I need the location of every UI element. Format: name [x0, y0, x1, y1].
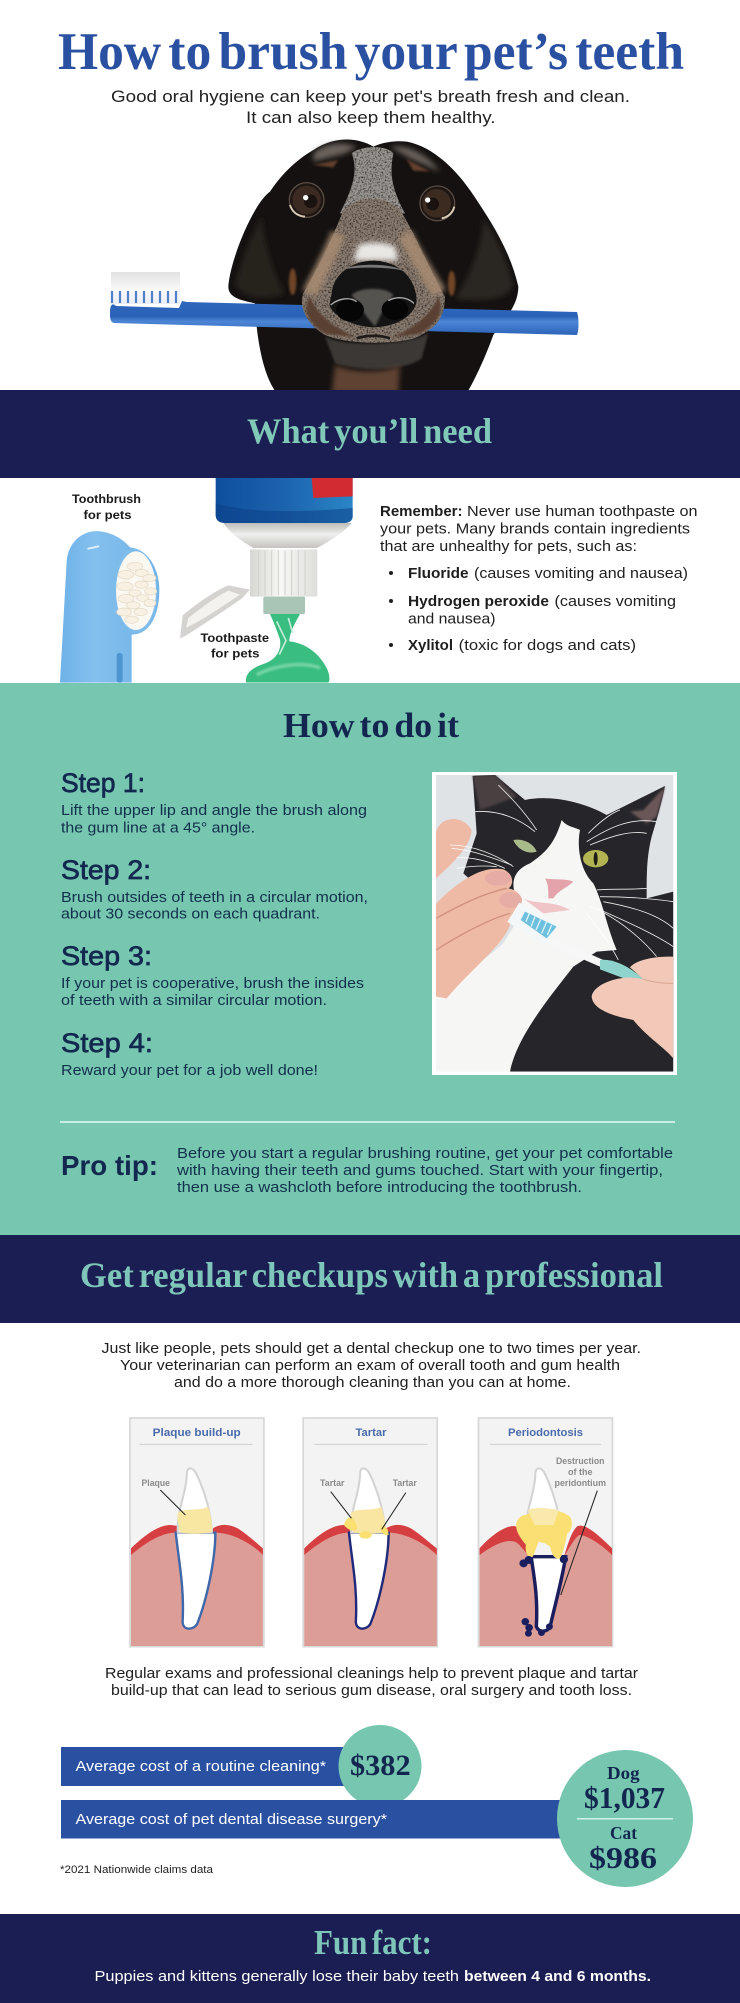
label: toothpaste for pets: for pets — [211, 646, 260, 660]
label: plaque: Plaque — [142, 1478, 170, 1488]
dog muzzle — [302, 199, 445, 343]
labels: tartar callouts: Tartar — [320, 1478, 345, 1488]
badge: dog and cat cost: $986 — [589, 1840, 657, 1875]
text: fun fact — [94, 1968, 651, 1985]
badge: $382 — [338, 1725, 422, 1807]
subtitle: It can also keep them healthy. — [246, 108, 496, 127]
list: unhealthy ingredients: Xylitol — [408, 637, 453, 654]
badge: $382: $382 — [350, 1749, 411, 1782]
badge: dog and cat cost — [557, 1750, 693, 1887]
photo: dog holding toothbrush — [110, 140, 578, 393]
title: How to brush your pet’s teeth — [58, 23, 684, 81]
panel: supplies — [60, 478, 698, 683]
band: what you'll need — [0, 390, 740, 478]
label: toothpaste for pets: Toothpaste — [200, 631, 269, 645]
label: plaque build-up: Plaque build-up — [153, 1427, 241, 1439]
subtitle — [111, 87, 630, 127]
labels: tartar callouts: Tartar — [393, 1478, 417, 1488]
step 3 — [61, 941, 364, 1009]
right eye — [420, 186, 455, 221]
text: regular exams — [105, 1665, 638, 1699]
text: checkup intro — [102, 1340, 641, 1391]
step 2: Brush outsides of teeth in a circular motion, — [61, 889, 368, 906]
bar: routine cleaning — [61, 1747, 351, 1786]
step 3: Step 3: — [61, 941, 152, 971]
divider — [60, 1121, 675, 1123]
pro tip text: then use a washcloth before introducing the toothbrush. — [177, 1179, 582, 1196]
step 1: Lift the upper lip and angle the brush along — [61, 802, 367, 819]
left eye — [289, 183, 324, 217]
step 3: If your pet is cooperative, brush the insides — [61, 975, 364, 992]
diagram: plaque build-up — [130, 1418, 264, 1647]
dog head — [228, 140, 518, 393]
label: destruction of the peridontium — [554, 1456, 606, 1488]
label: toothbrush for pets — [72, 492, 141, 522]
toothbrush — [110, 272, 578, 335]
cat dark fur — [463, 775, 673, 1072]
bar: dental disease surgery — [61, 1800, 566, 1838]
list: unhealthy ingredients: Fluoride — [408, 565, 469, 582]
lower chin — [325, 333, 428, 369]
label: toothpaste for pets — [200, 631, 269, 660]
step 4: Reward your pet for a job well done! — [61, 1062, 318, 1079]
text: regular exams: build-up that can lead to serious gum disease, oral surgery and tooth loss. — [111, 1682, 632, 1699]
text: remember — [380, 503, 698, 555]
heading: what you'll need: What you’ll need — [247, 411, 492, 451]
labels: tartar callouts — [320, 1478, 417, 1488]
heading: fun fact: Fun fact: — [314, 1923, 432, 1962]
text: checkup intro: Your veterinarian can perform an exam of overall tooth and gum health — [120, 1357, 620, 1374]
text: checkup intro: and do a more thorough cleaning than you can at home. — [174, 1374, 571, 1391]
left hand — [436, 819, 472, 878]
text: fun fact: between 4 and 6 months. — [464, 1968, 651, 1985]
nose — [329, 261, 417, 327]
toothbrush — [584, 954, 603, 967]
text: remember: Never use human toothpaste on — [467, 503, 698, 520]
list: unhealthy ingredients: (causes vomiting and nausea) — [474, 565, 688, 582]
heading: get regular checkups: Get regular checkups with a professional — [80, 1255, 663, 1295]
pro tip label: Pro tip: — [61, 1150, 158, 1181]
step 2: about 30 seconds on each quadrant. — [61, 906, 320, 922]
step 1: the gum line at a 45° angle. — [61, 820, 255, 836]
heading: how to do it: How to do it — [283, 706, 459, 745]
text: remember: your pets. Many brands contain ingredients — [380, 520, 690, 538]
photo: cat having teeth brushed — [432, 772, 677, 1075]
text: checkup intro: Just like people, pets should get a dental checkup one to two times per year. — [102, 1340, 641, 1357]
step 4 — [61, 1028, 318, 1079]
step 3: of teeth with a similar circular motion. — [61, 992, 327, 1009]
text: regular exams: Regular exams and professional cleanings help to prevent plaque and tartar — [105, 1665, 638, 1682]
label: toothbrush for pets: for pets — [84, 508, 132, 522]
forehead blaze — [340, 147, 405, 213]
tan patches — [289, 268, 296, 295]
pro tip text: Before you start a regular brushing routine, get your pet comfortable — [177, 1145, 673, 1162]
label: destruction of the peridontium: of the — [568, 1467, 592, 1477]
text: fun fact: Puppies and kittens generally lose their baby teeth — [94, 1968, 459, 1985]
footnote: *2021 Nationwide claims data — [60, 1864, 214, 1876]
right hand — [592, 957, 673, 1058]
label: destruction of the peridontium: peridontium — [554, 1478, 606, 1488]
badge: dog and cat cost: Dog — [607, 1763, 640, 1783]
cost chart — [60, 1725, 693, 1887]
text: remember: that are unhealthy for pets, such as: — [380, 538, 637, 555]
step 1 — [61, 768, 367, 836]
diagram: tartar — [303, 1418, 437, 1647]
whiskers — [450, 785, 673, 960]
bar: routine cleaning: Average cost of a routine cleaning* — [76, 1758, 326, 1775]
label: tartar heading: Tartar — [356, 1427, 387, 1439]
step 2 — [61, 855, 368, 922]
band: fun fact — [0, 1914, 740, 2003]
list: unhealthy ingredients: (causes vomiting — [554, 593, 676, 610]
list: unhealthy ingredients — [389, 565, 688, 654]
label: periodontosis heading: Periodontosis — [508, 1427, 583, 1439]
pro tip text: with having their teeth and gums touched. Start with your fingertip, — [176, 1162, 663, 1179]
panel: how to do it — [0, 683, 740, 1235]
step 4: Step 4: — [61, 1028, 153, 1058]
label: toothbrush for pets: Toothbrush — [72, 492, 141, 506]
step 2: Step 2: — [61, 855, 151, 885]
cat eyes — [513, 840, 537, 853]
icon: pet finger toothbrush — [60, 531, 160, 683]
badge: dog and cat cost: $1,037 — [584, 1780, 665, 1815]
bar: dental disease surgery: Average cost of pet dental disease surgery* — [76, 1811, 387, 1828]
pro tip text — [176, 1145, 673, 1196]
cat nose and mouth — [545, 878, 573, 898]
cat white fur — [436, 820, 617, 1072]
band: get regular checkups — [0, 1235, 740, 1323]
list: unhealthy ingredients: and nausea) — [408, 610, 496, 628]
diagram: periodontosis — [478, 1418, 612, 1647]
icon: toothpaste tube — [180, 478, 353, 683]
label: destruction of the peridontium: Destruction — [556, 1456, 604, 1466]
step 1: Step 1: — [61, 768, 145, 798]
badge: dog and cat cost: Cat — [610, 1823, 637, 1843]
list: unhealthy ingredients: Hydrogen peroxide — [408, 593, 549, 610]
text: remember: Remember: — [380, 503, 462, 520]
subtitle: Good oral hygiene can keep your pet's breath fresh and clean. — [111, 87, 630, 106]
list: unhealthy ingredients: (toxic for dogs and cats) — [459, 637, 636, 654]
